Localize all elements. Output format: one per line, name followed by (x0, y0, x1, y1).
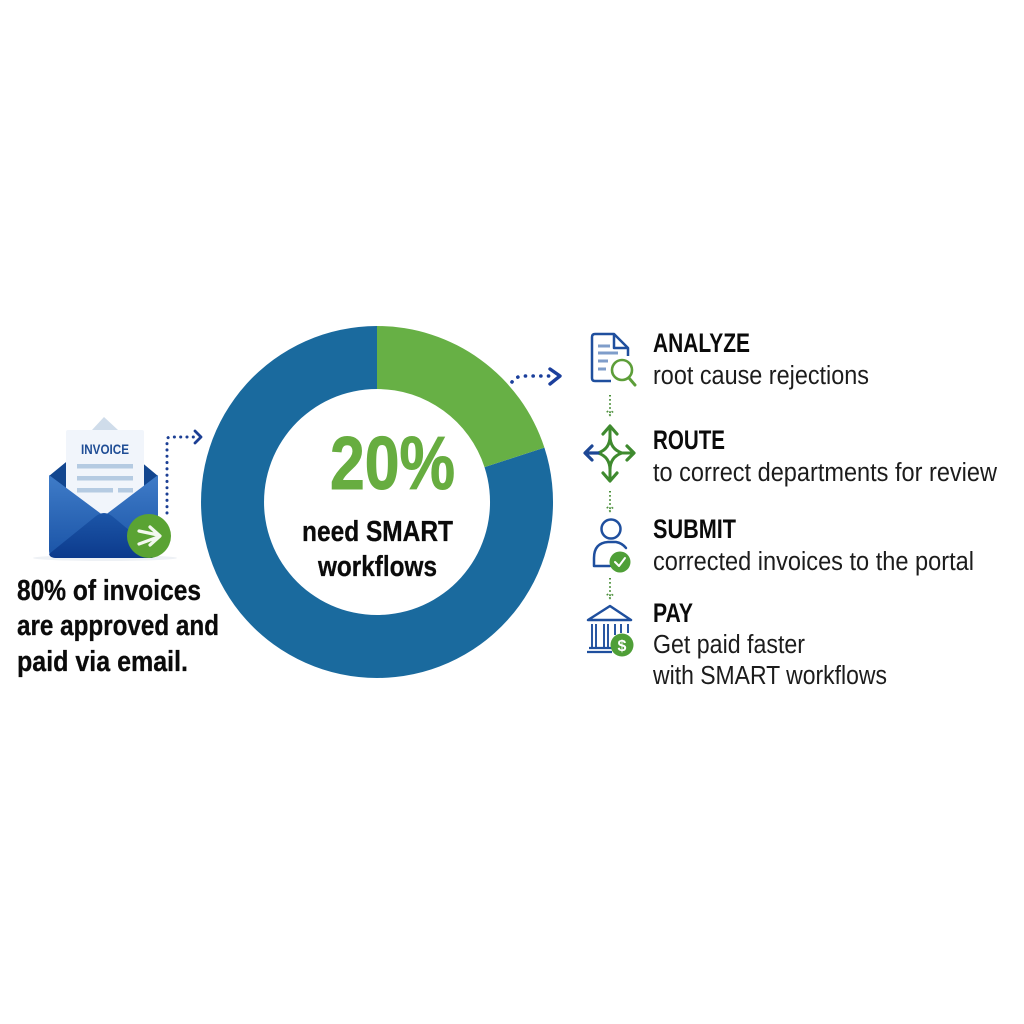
step: route (585, 425, 998, 487)
icon: invoice envelope (33, 417, 177, 561)
left caption: paid via email. (17, 646, 188, 678)
step: pay (587, 598, 887, 690)
centre caption: need SMART (302, 516, 454, 548)
left caption: 80% of invoices (17, 575, 201, 607)
step description: corrected invoices to the portal (653, 548, 974, 576)
step heading: ANALYZE (653, 328, 750, 358)
icon: person with check (594, 520, 630, 572)
icon: bank with dollar (587, 606, 634, 656)
connector: route to submit (607, 491, 613, 511)
step description: root cause rejections (653, 362, 869, 390)
icon: four-way arrows (585, 426, 634, 481)
step description: to correct departments for review (653, 459, 998, 487)
donut segment: 80% (201, 326, 553, 678)
donut chart (201, 326, 553, 678)
step: analyze (592, 328, 869, 390)
arrow: envelope to donut (167, 431, 201, 513)
step heading: PAY (653, 598, 693, 628)
arrow: green segment to steps (512, 369, 560, 384)
step heading: ROUTE (653, 425, 725, 455)
connector: analyze to route (607, 395, 613, 415)
big percentage: 20% (330, 421, 455, 505)
step heading: SUBMIT (653, 514, 736, 544)
icon: document with magnifier (592, 334, 635, 385)
donut segment: 20% (377, 326, 544, 467)
icon: green arrow badge (127, 514, 171, 558)
icon: bank with dollar: $ (618, 638, 627, 655)
connector: submit to pay (607, 578, 613, 598)
invoice sheet (66, 430, 144, 520)
step description: with SMART workflows (652, 662, 887, 690)
left caption: are approved and (17, 610, 219, 642)
donut centre label (302, 421, 455, 583)
invoice sheet: INVOICE (81, 442, 129, 457)
step description: Get paid faster (653, 631, 805, 659)
step: submit (594, 514, 974, 576)
centre caption: workflows (317, 551, 437, 583)
